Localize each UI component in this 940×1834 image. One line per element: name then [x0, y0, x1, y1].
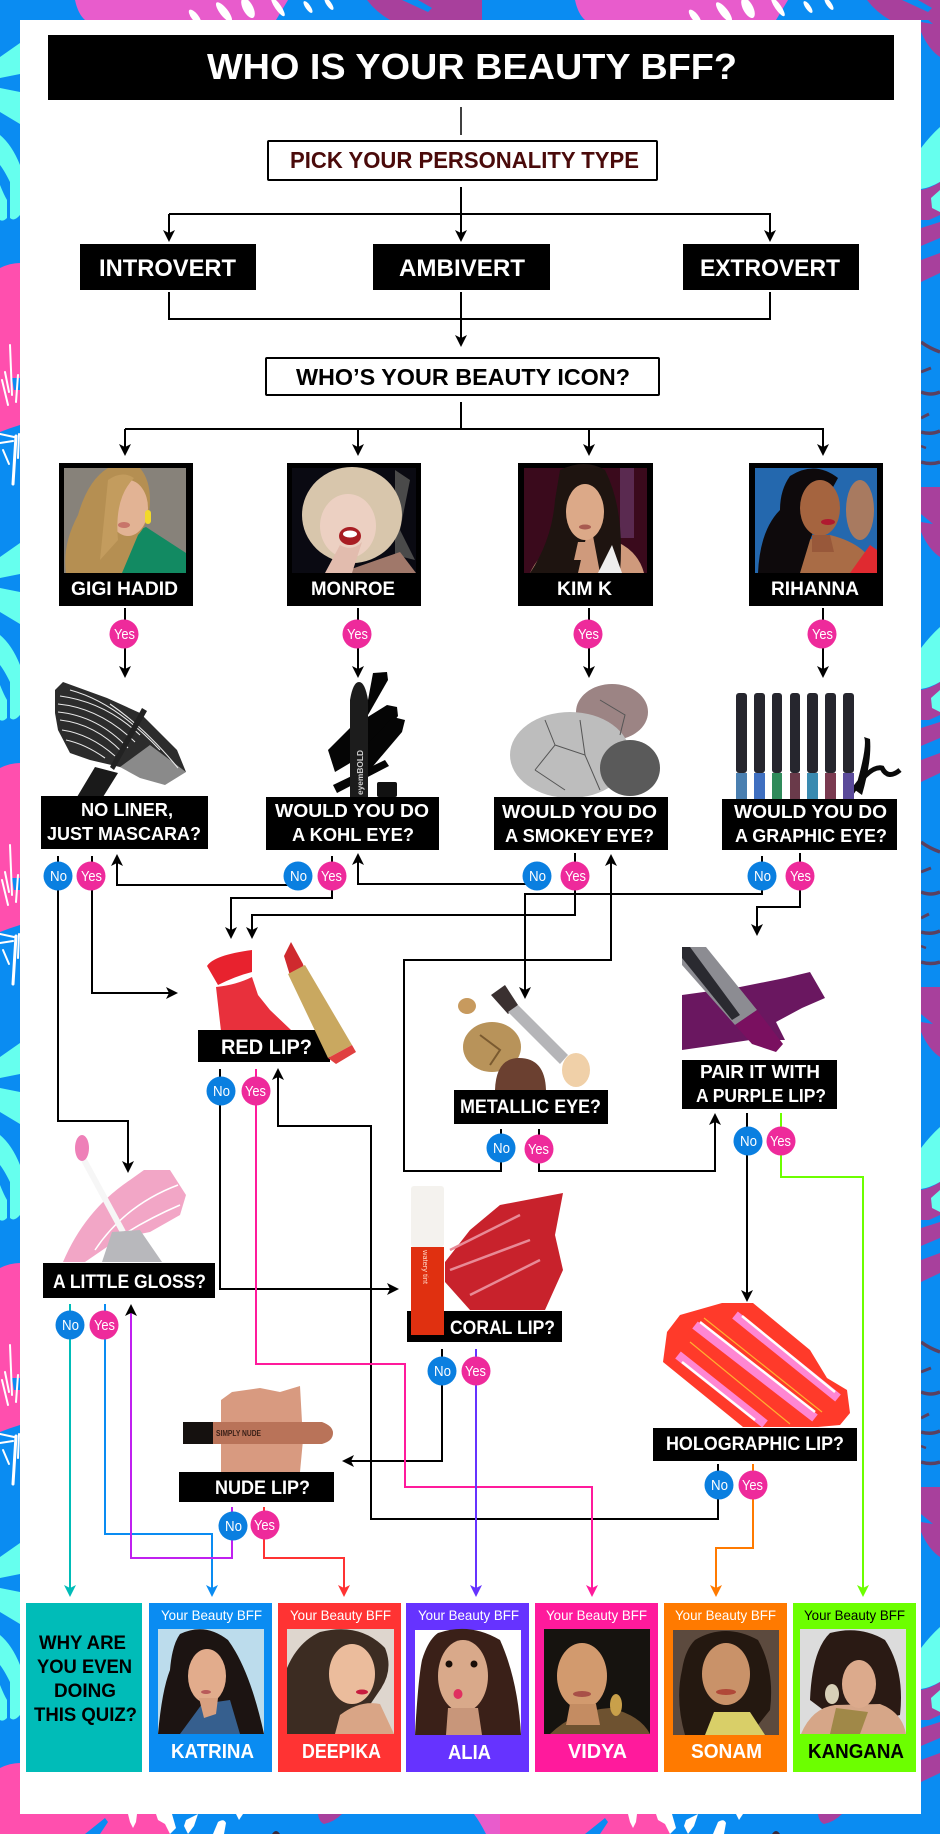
question box: smokey eye — [494, 797, 668, 850]
question box: kohl eye — [266, 797, 439, 850]
decision badges: No and Yes circles: No — [754, 868, 771, 885]
icon: nude lipstick and swatch — [183, 1386, 333, 1472]
icon: nude lipstick and swatch: SIMPLY NUDE — [216, 1429, 262, 1438]
decision badges: No and Yes circles: Yes — [742, 1477, 763, 1494]
decision badges: No and Yes circles: Yes — [321, 868, 342, 885]
question box: purple lip: A PURPLE LIP? — [696, 1085, 826, 1106]
result card: Alia — [406, 1603, 529, 1772]
arrow: Monroe to kohl with Yes: Yes — [347, 626, 368, 643]
result card: Deepika — [278, 1603, 401, 1772]
result card: Kangana: KANGANA — [808, 1741, 904, 1763]
question box: red lip: RED LIP? — [221, 1036, 312, 1059]
box: introvert — [80, 244, 256, 290]
icon: coral lip tint tube: watery tint — [421, 1249, 428, 1284]
icon: metallic eye powders and brush — [458, 985, 590, 1090]
heading box: who's your beauty icon: WHO’S YOUR BEAUTY ICON? — [296, 364, 630, 390]
result card: Alia: ALIA — [448, 1742, 491, 1764]
question box: metallic eye: METALLIC EYE? — [460, 1096, 601, 1118]
result card: Deepika: Your Beauty BFF — [290, 1607, 391, 1623]
icon: coral lip tint tube — [411, 1186, 444, 1335]
result card: Vidya: VIDYA — [568, 1741, 627, 1763]
decision badges: No and Yes circles: No — [434, 1363, 451, 1380]
decision badges: No and Yes circles: Yes — [565, 868, 586, 885]
decision badges: No and Yes circles: No — [529, 868, 546, 885]
icon: holographic lip smear — [663, 1303, 850, 1427]
icon: red lipstick and smear — [207, 950, 291, 1040]
result card: Katrina: Your Beauty BFF — [161, 1607, 262, 1623]
decision badges: No and Yes circles: No — [711, 1477, 728, 1494]
arrows: types merge to beauty icon box — [169, 292, 770, 345]
result card: Alia: Your Beauty BFF — [418, 1607, 519, 1623]
decision badges: No and Yes circles: No — [225, 1518, 242, 1535]
result card: Kangana: Your Beauty BFF — [804, 1607, 905, 1623]
box: extrovert: EXTROVERT — [700, 255, 840, 282]
decision badges: No and Yes circles: Yes — [81, 868, 102, 885]
heading box: pick your personality type — [268, 141, 657, 180]
result card: Deepika: DEEPIKA — [302, 1741, 381, 1763]
decision badges: No and Yes circles: Yes — [94, 1317, 115, 1334]
result card: Vidya: Your Beauty BFF — [546, 1607, 647, 1623]
result card: why are you even doing this quiz — [26, 1603, 142, 1772]
question box: kohl eye: WOULD YOU DO — [275, 800, 429, 821]
icon card: Monroe: MONROE — [311, 579, 395, 600]
question box: metallic eye — [454, 1090, 608, 1124]
question box: holographic lip: HOLOGRAPHIC LIP? — [666, 1433, 844, 1455]
question box: coral lip — [407, 1311, 562, 1342]
result card: Katrina — [149, 1603, 272, 1772]
icon card: Rihanna — [749, 463, 883, 606]
decision badges: No and Yes circles: No — [493, 1140, 510, 1157]
arrow: Monroe to kohl with Yes — [342, 608, 372, 676]
icon: coral lip smear — [445, 1193, 563, 1310]
question box: graphic eye — [722, 799, 897, 850]
icon card: Gigi Hadid: GIGI HADID — [71, 579, 178, 600]
decision badges: No and Yes circles: No — [213, 1083, 230, 1100]
question box: red lip — [198, 1030, 330, 1062]
icon card: Kim K — [518, 463, 653, 606]
decision badges: No and Yes circles: Yes — [770, 1133, 791, 1150]
question box: graphic eye: A GRAPHIC EYE? — [735, 825, 887, 846]
arrow: Gigi to mascara with Yes: Yes — [114, 626, 135, 643]
arrow: Rihanna to graphic with Yes: Yes — [812, 626, 833, 643]
question box: gloss: A LITTLE GLOSS? — [53, 1271, 206, 1293]
question box: smokey eye: WOULD YOU DO — [502, 801, 657, 822]
question box: purple lip — [682, 1060, 837, 1109]
question box: no liner just mascara: JUST MASCARA? — [47, 823, 201, 844]
title banner — [48, 35, 894, 100]
arrow: Rihanna to graphic with Yes — [808, 608, 836, 676]
icon: smokey eye powder — [510, 684, 660, 798]
result card: why are you even doing this quiz: YOU EVEN — [37, 1656, 132, 1678]
question box: nude lip: NUDE LIP? — [215, 1477, 310, 1499]
box: ambivert: AMBIVERT — [399, 255, 525, 282]
title banner: WHO IS YOUR BEAUTY BFF? — [207, 46, 737, 87]
question box: kohl eye: A KOHL EYE? — [292, 824, 414, 845]
arrows: beauty icon to four icons — [125, 402, 823, 454]
decision badges: No and Yes circles: No — [740, 1133, 757, 1150]
decision badges: No and Yes circles: Yes — [245, 1083, 266, 1100]
question box: smokey eye: A SMOKEY EYE? — [505, 825, 654, 846]
arrow: Gigi to mascara with Yes — [110, 608, 138, 676]
result card: Sonam — [664, 1603, 787, 1772]
question box: graphic eye: WOULD YOU DO — [734, 801, 887, 822]
icon: mascara — [55, 682, 186, 797]
question box: gloss — [43, 1263, 215, 1298]
decision badges: No and Yes circles: Yes — [528, 1141, 549, 1158]
result card: Sonam: Your Beauty BFF — [675, 1607, 776, 1623]
decision badges: No and Yes circles — [44, 862, 814, 1540]
decision badges: No and Yes circles: Yes — [254, 1517, 275, 1534]
result card: Kangana — [793, 1603, 916, 1772]
result card: why are you even doing this quiz: THIS QUIZ? — [34, 1704, 137, 1726]
result card: Sonam: SONAM — [691, 1741, 762, 1763]
connector: title to personality box — [460, 107, 462, 135]
arrow: Kim K to smokey with Yes: Yes — [578, 626, 599, 643]
question box: nude lip — [179, 1472, 334, 1502]
decision badges: No and Yes circles: Yes — [465, 1363, 486, 1380]
icon card: Monroe — [287, 463, 421, 606]
box: ambivert — [373, 244, 550, 290]
flow lines: coloured routes to results — [70, 1069, 863, 1595]
decision badges: No and Yes circles: Yes — [790, 868, 811, 885]
decision badges: No and Yes circles: No — [290, 868, 307, 885]
heading box: who's your beauty icon — [266, 358, 659, 395]
result card: why are you even doing this quiz: WHY ARE — [39, 1632, 126, 1654]
arrow: Kim K to smokey with Yes — [574, 608, 602, 676]
icon card: Kim K: KIM K — [557, 579, 612, 600]
icon card: Rihanna: RIHANNA — [771, 579, 859, 600]
box: introvert: INTROVERT — [99, 255, 236, 282]
icon: gold lipstick — [284, 942, 356, 1064]
heading box: pick your personality type: PICK YOUR PERSONALITY TYPE — [290, 147, 639, 173]
decision badges: No and Yes circles: No — [50, 868, 67, 885]
box: extrovert — [683, 244, 859, 290]
icon: graphic eyeliners — [736, 693, 900, 799]
icon: purple lipstick and swatch — [682, 947, 825, 1052]
icon: pink lip gloss — [63, 1135, 186, 1262]
icon: kohl pencil and swatch — [328, 672, 405, 797]
flow lines: black routes — [58, 853, 800, 1519]
icon card: Gigi Hadid — [59, 463, 193, 606]
question box: no liner just mascara — [41, 796, 208, 849]
question box: no liner just mascara: NO LINER, — [81, 799, 173, 820]
result card: Katrina: KATRINA — [171, 1741, 254, 1763]
question box: holographic lip — [653, 1428, 857, 1461]
result card: Vidya — [535, 1603, 658, 1772]
result card: why are you even doing this quiz: DOING — [54, 1680, 116, 1702]
arrows: personality box to three types — [169, 187, 770, 240]
question box: coral lip: CORAL LIP? — [450, 1317, 555, 1339]
question box: purple lip: PAIR IT WITH — [700, 1061, 820, 1082]
icon: kohl pencil and swatch: eyemBOLD — [356, 750, 365, 795]
decision badges: No and Yes circles: No — [62, 1317, 79, 1334]
